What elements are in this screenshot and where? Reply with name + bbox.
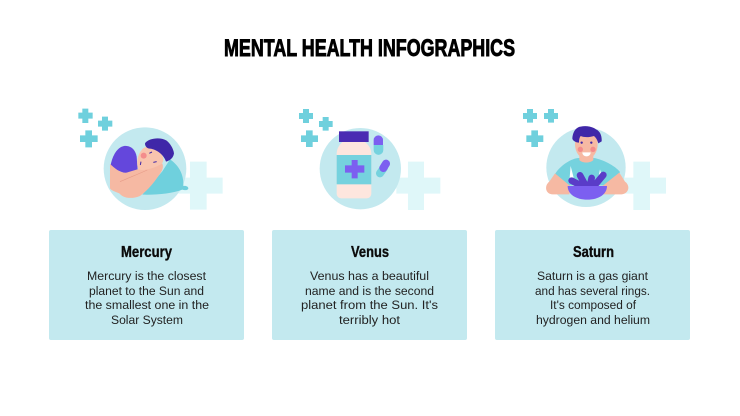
icon: small plus cluster	[523, 109, 558, 147]
panel: venus card	[272, 230, 467, 340]
text: venus description: Venus has a beautiful	[310, 269, 429, 283]
icon: large pale plus	[622, 162, 666, 210]
icon: medicine bottle and pills	[320, 128, 401, 209]
panel: mercury illustration	[78, 109, 223, 210]
panel: saturn illustration	[523, 109, 666, 210]
heading: saturn: Saturn	[573, 244, 614, 261]
heading: venus: Venus	[351, 244, 389, 261]
icon: large pale plus	[178, 162, 223, 210]
icon: small plus cluster	[78, 109, 112, 147]
icon: small plus cluster	[299, 109, 333, 147]
text: venus description: name and is the second	[305, 284, 434, 298]
panel: venus illustration	[299, 109, 440, 210]
text: mercury description: Mercury is the closest	[87, 269, 207, 283]
text: saturn description: It's composed of	[550, 298, 637, 312]
title: MENTAL HEALTH INFOGRAPHICS	[224, 35, 515, 62]
text: venus description	[301, 269, 438, 327]
text: mercury description: Solar System	[111, 313, 183, 327]
text: saturn description: and has several rings.	[535, 284, 650, 298]
panel: saturn card	[495, 230, 690, 340]
icon: large pale plus	[396, 162, 440, 210]
text: saturn description: hydrogen and helium	[536, 313, 650, 327]
text: mercury description	[85, 269, 209, 327]
text: saturn description	[535, 269, 650, 327]
icon: sleeping person	[104, 127, 188, 210]
text: venus description: planet from the Sun. It's	[301, 298, 438, 312]
text: saturn description: Saturn is a gas giant	[537, 269, 649, 283]
text: mercury description: the smallest one in the	[85, 298, 209, 312]
heading: mercury: Mercury	[121, 244, 172, 261]
panel: mercury card	[49, 230, 244, 340]
icon: person with salad bowl	[546, 126, 628, 207]
text: mercury description: planet to the Sun and	[89, 284, 204, 298]
text: venus description: terribly hot	[339, 313, 401, 327]
